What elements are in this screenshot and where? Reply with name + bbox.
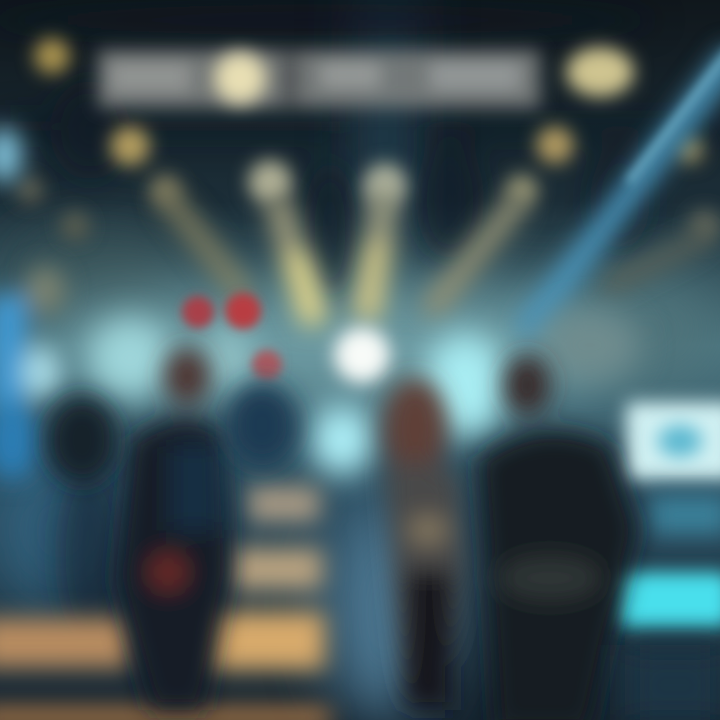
blue diagonal streak	[530, 60, 720, 325]
light streaks	[170, 200, 700, 312]
floor stripes	[0, 486, 330, 720]
central white light	[334, 327, 390, 383]
red lights	[182, 293, 282, 380]
person 3: woman with long hair	[383, 378, 465, 710]
cyan glow panels	[88, 310, 640, 476]
person 1: left man	[115, 348, 232, 710]
person 4: right man	[478, 355, 638, 720]
blue streak highlight	[630, 50, 720, 180]
left blue lights	[0, 127, 65, 480]
right bright screen	[626, 402, 720, 535]
person 2: back figures	[46, 383, 298, 484]
top sign band	[98, 50, 540, 108]
lower right dark corner	[625, 645, 720, 720]
right cyan bar	[616, 572, 720, 628]
ceiling spotlights	[16, 38, 720, 243]
